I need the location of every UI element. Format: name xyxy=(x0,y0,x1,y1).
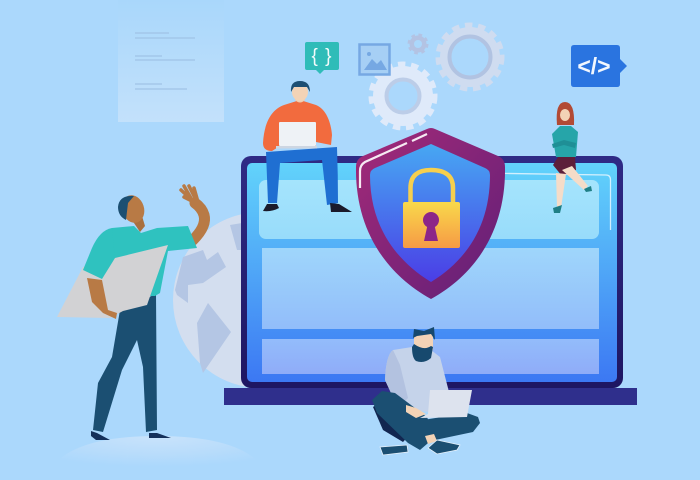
board xyxy=(57,245,168,318)
screen panel top xyxy=(259,180,599,239)
laptop screen xyxy=(247,163,617,382)
padlock xyxy=(403,170,460,248)
laptop frame xyxy=(241,156,623,388)
gear large right xyxy=(440,27,500,87)
floor mound xyxy=(45,436,270,480)
screen highlight line xyxy=(480,173,610,230)
person: woman sitting xyxy=(552,102,592,213)
illustration canvas xyxy=(57,22,637,459)
icon: curly brace bubble: { } xyxy=(312,46,332,67)
screen panel bottom xyxy=(262,339,599,374)
icon: picture xyxy=(360,44,390,74)
shield xyxy=(356,128,505,299)
document panel xyxy=(118,0,224,122)
icon: curly brace bubble xyxy=(305,42,339,74)
person: man with laptop on top xyxy=(263,81,352,212)
laptop base xyxy=(224,388,637,405)
gear small xyxy=(410,36,426,52)
globe xyxy=(173,214,246,386)
gear large left xyxy=(373,66,433,126)
screen panel middle xyxy=(262,248,599,329)
icon: code bubble xyxy=(571,45,627,87)
person: man holding board xyxy=(57,186,205,440)
laptop xyxy=(224,156,637,405)
icon: code bubble: </> xyxy=(577,53,611,79)
person: bearded man sitting with laptop xyxy=(372,327,480,455)
